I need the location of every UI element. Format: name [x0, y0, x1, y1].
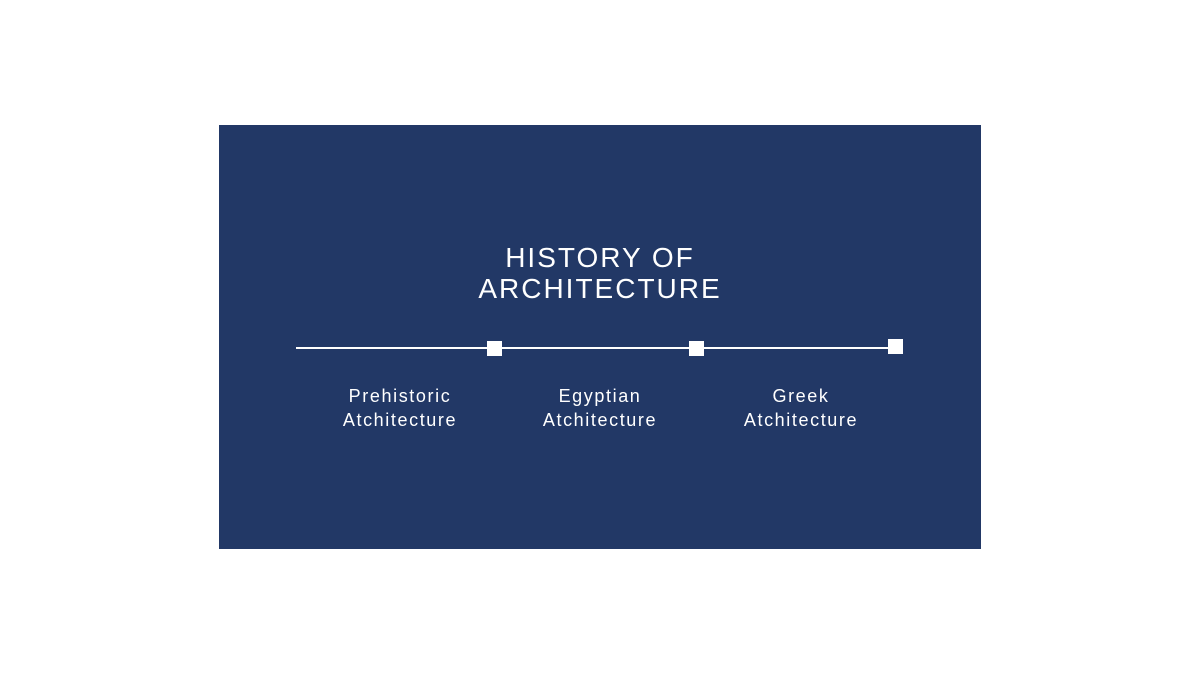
label: prehistoric: Atchitecture	[343, 410, 457, 430]
title: ARCHITECTURE	[478, 273, 722, 304]
label: egyptian: Egyptian	[559, 386, 641, 406]
timeline line	[296, 347, 896, 349]
title	[478, 242, 722, 304]
label: prehistoric	[342, 386, 457, 430]
panel: background	[219, 125, 981, 549]
title: HISTORY OF	[505, 242, 695, 273]
label: greek: Greek	[772, 386, 830, 406]
marker 1	[487, 341, 502, 356]
timeline	[296, 339, 903, 356]
label: egyptian	[542, 386, 657, 430]
label: greek: Atchitecture	[744, 410, 858, 430]
label: prehistoric: Prehistoric	[349, 386, 451, 406]
marker 2	[689, 341, 704, 356]
label: egyptian: Atchitecture	[543, 410, 657, 430]
label: greek	[744, 386, 858, 430]
marker 3	[888, 339, 903, 354]
